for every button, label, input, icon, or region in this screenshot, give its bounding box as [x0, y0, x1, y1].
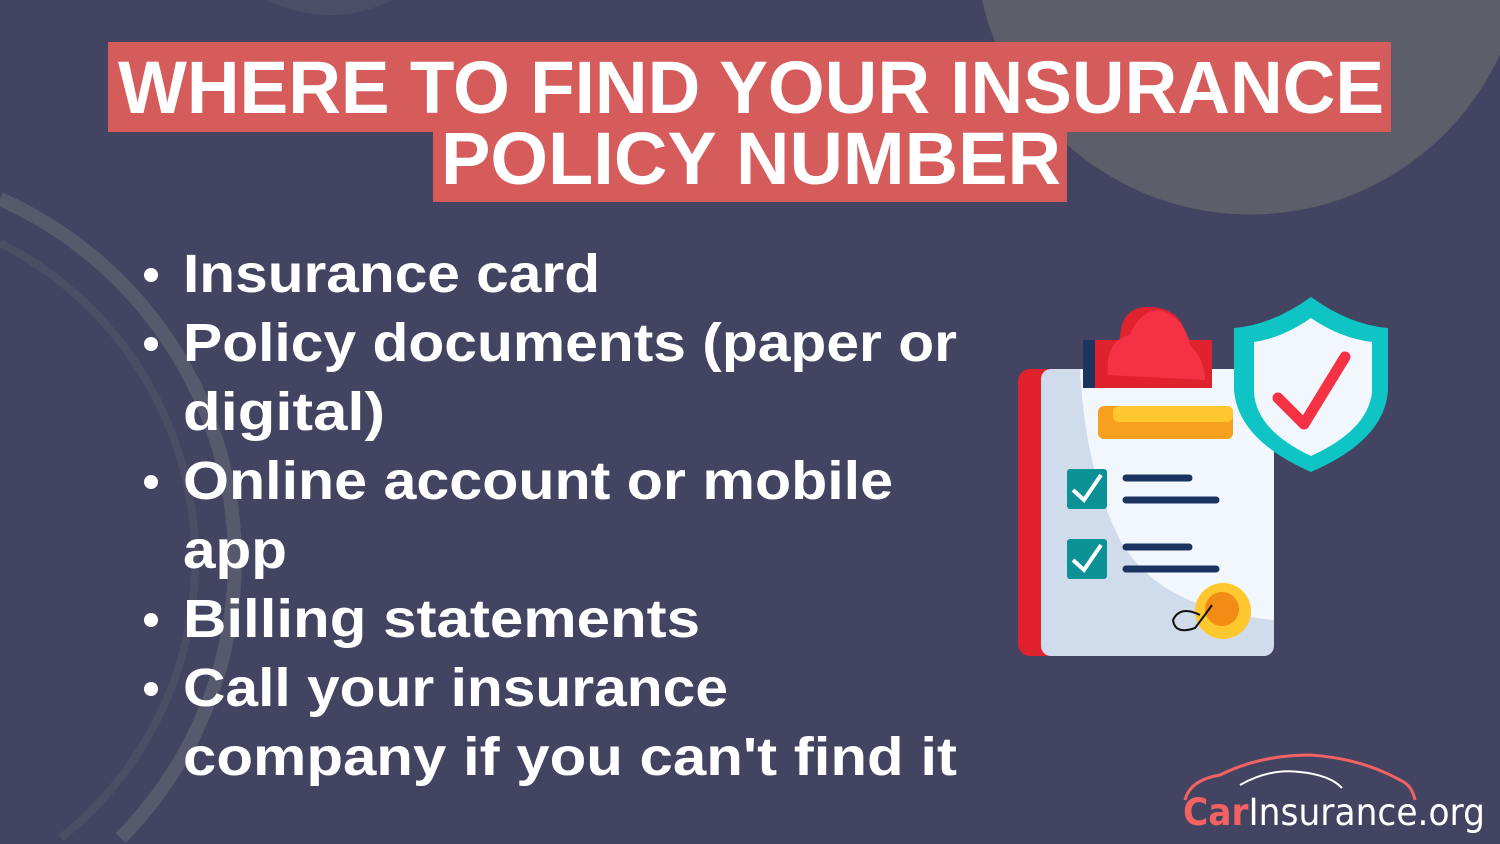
- bullet list: Policy documents (paper or: [183, 313, 957, 373]
- bullet list: digital): [183, 382, 385, 442]
- logo: [1183, 755, 1485, 834]
- bullet list: app: [183, 520, 287, 580]
- title: POLICY NUMBER: [441, 117, 1061, 200]
- bullet list: [144, 244, 957, 787]
- bullet list: company if you can't find it: [183, 727, 957, 787]
- icon: shield: [1234, 297, 1388, 472]
- bullet list: Call your insurance: [183, 658, 728, 718]
- logo: CarInsurance.org: [1183, 791, 1485, 834]
- bullet list: Billing statements: [183, 589, 700, 649]
- title: WHERE TO FIND YOUR INSURANCE: [118, 46, 1384, 129]
- bullet list: Online account or mobile: [183, 451, 893, 511]
- title: [108, 42, 1391, 202]
- bullet list: Insurance card: [183, 244, 600, 304]
- icon: clipboard: [1018, 307, 1274, 656]
